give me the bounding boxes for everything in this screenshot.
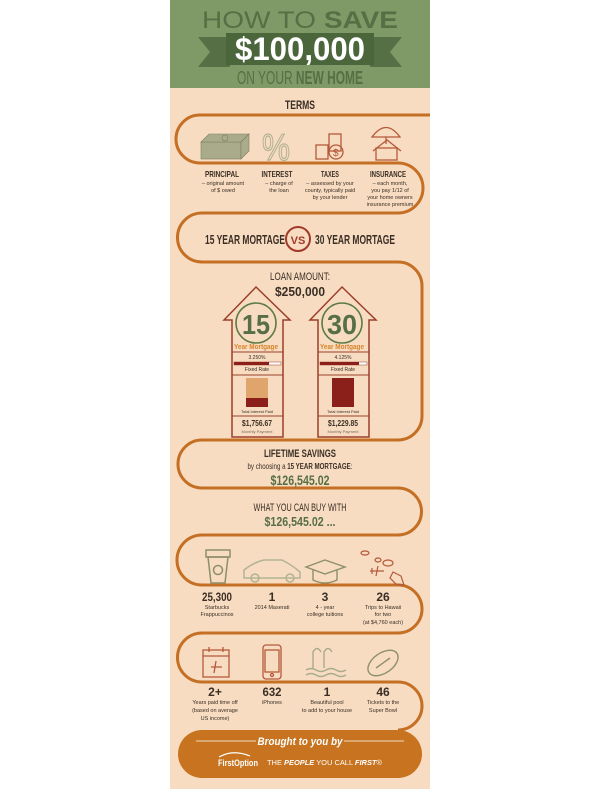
stat: hawaii: for two	[375, 612, 391, 618]
stat: starbucks: Frappuccinos	[200, 612, 234, 618]
serpentine path	[176, 115, 430, 730]
lifetime savings: by choosing a 15 YEAR MORTGAGE:	[248, 462, 352, 471]
stat: maserati: 1	[269, 590, 276, 604]
icon: graduation cap	[306, 560, 345, 583]
term: interest	[262, 169, 293, 194]
stat: super bowl	[367, 685, 399, 714]
heading: terms: TERMS	[285, 98, 315, 112]
stat: iphones	[262, 685, 282, 706]
icon: car	[244, 560, 300, 582]
term: interest: the loan	[269, 188, 289, 194]
stat: maserati	[255, 590, 289, 611]
stat: pool: 1	[324, 685, 331, 699]
stat: super bowl: Super Bowl	[369, 708, 397, 714]
loan amount: LOAN AMOUNT:	[270, 271, 330, 283]
panel: 30 year house: Fixed Rate	[331, 367, 355, 373]
term: principal: PRINCIPAL	[205, 169, 239, 179]
stat: pool: Beautiful pool	[310, 700, 344, 706]
stat: iphones: iPhones	[262, 700, 282, 706]
row 2 stats	[192, 685, 399, 722]
icon: coffee cup	[206, 550, 230, 583]
stat: paid time off: US income)	[201, 716, 230, 722]
stat: super bowl: Tickets to the	[367, 700, 399, 706]
stat: hawaii: (at $4,760 each)	[363, 620, 403, 626]
term: principal: – original amount	[202, 181, 245, 187]
heading: 15 vs 30: 30 YEAR MORTAGE	[315, 232, 395, 247]
term: taxes	[305, 169, 355, 201]
term: taxes: – assessed by your	[306, 181, 354, 187]
panel: 15 year house: 3.250%	[249, 355, 266, 361]
stat: hawaii: 26	[376, 590, 390, 604]
panel: 30 year house: 30	[327, 309, 357, 340]
stat: paid time off: Years paid time off	[192, 700, 238, 706]
panel: 30 year house: 4.125%	[335, 355, 352, 361]
title line 1: HOW TO SAVE	[202, 7, 398, 34]
stat: tuition: 3	[322, 590, 329, 604]
stat: hawaii	[363, 590, 403, 626]
panel: 15 year house: Total Interest Paid	[241, 409, 273, 414]
panel: 15 year house	[224, 287, 290, 437]
what you can buy heading: $126,545.02 ...	[264, 514, 336, 529]
loan amount	[270, 271, 330, 299]
heading: 15 vs 30: 15 YEAR MORTAGE	[205, 232, 285, 247]
title line 3: ON YOUR NEW HOME	[237, 68, 363, 88]
term: insurance: INSURANCE	[370, 169, 406, 179]
stat: pool: to add to your house	[302, 708, 352, 714]
lifetime savings: LIFETIME SAVINGS	[264, 448, 336, 460]
panel: 30 year house: $1,229.85	[328, 419, 358, 428]
ribbon: $100,000	[235, 31, 365, 67]
banner: brought to you by: Brought to you by	[258, 736, 343, 748]
term: insurance	[367, 169, 414, 208]
term: principal	[202, 169, 245, 194]
panel: 30 year house: Monthly Payment	[328, 429, 359, 434]
panel: 15 year house: Monthly Payment	[242, 429, 273, 434]
term: taxes: by your lender	[313, 195, 348, 201]
loan amount: $250,000	[275, 284, 325, 299]
heading: 15 vs 30: VS	[291, 235, 305, 247]
icon: hawaii islands plane	[361, 551, 404, 585]
stat: pool	[302, 685, 352, 714]
row 1 stats	[200, 590, 403, 626]
logo: first option	[218, 753, 258, 768]
panel: 15 year house: $1,756.67	[242, 419, 272, 428]
banner: brought to you by	[178, 730, 422, 778]
heading: 15 vs 30	[205, 227, 395, 251]
header	[170, 0, 430, 88]
panel: 15 year house: Year Mortgage	[234, 344, 278, 351]
term: insurance: insurance premium	[367, 202, 414, 208]
stat: tuition	[307, 590, 343, 618]
panel: 15 year house: Fixed Rate	[245, 367, 269, 373]
panel: 30 year house: Year Mortgage	[320, 344, 364, 351]
term: interest: – charge of	[265, 181, 293, 187]
stat: tuition: 4 - year	[316, 605, 334, 611]
lifetime savings	[248, 448, 352, 488]
lifetime savings: $126,545.02	[270, 472, 330, 488]
stat: starbucks: 25,300	[202, 590, 232, 604]
icon: iphone	[263, 645, 281, 679]
stat: tuition: college tuitions	[307, 612, 343, 618]
term: interest: INTEREST	[262, 169, 293, 179]
stat: super bowl: 46	[376, 685, 390, 699]
panel: background	[170, 0, 430, 789]
icon: pool	[306, 648, 346, 676]
icon: insurance house umbrella	[372, 128, 401, 160]
terms labels	[202, 169, 414, 208]
term: taxes: TAXES	[321, 169, 339, 179]
icon: principal money stack	[201, 134, 249, 159]
term: principal: of $ owed	[211, 188, 235, 194]
term: insurance: you pay 1/12 of	[371, 188, 409, 194]
stat: paid time off	[192, 685, 238, 722]
logo: first option: FirstOption	[218, 758, 258, 768]
panel: 30 year house: Total Interest Paid	[327, 409, 359, 414]
icon: taxes coins: $	[333, 148, 339, 159]
stat: hawaii: Trips to Hawaii	[365, 605, 401, 611]
panel: 15 year house: 15	[242, 309, 270, 340]
what you can buy heading	[254, 502, 347, 529]
what you can buy heading: WHAT YOU CAN BUY WITH	[254, 502, 347, 514]
stat: starbucks: Starbucks	[205, 605, 229, 611]
stat: starbucks	[200, 590, 234, 618]
stat: maserati: 2014 Maserati	[255, 605, 289, 611]
stat: paid time off: (based on average	[192, 708, 238, 714]
stat: iphones: 632	[262, 685, 282, 699]
banner: brought to you by: THE PEOPLE YOU CALL FIRST®	[267, 759, 383, 767]
icon: calendar plane	[203, 647, 229, 677]
stat: paid time off: 2+	[208, 685, 222, 699]
term: insurance: your home owners	[367, 195, 413, 201]
term: taxes: county, typically paid	[305, 188, 355, 194]
ribbon	[198, 31, 402, 67]
term: insurance: – each month,	[373, 181, 408, 187]
panel: 30 year house	[310, 287, 376, 437]
icon: taxes coins	[316, 134, 343, 159]
icon: interest percent: %	[262, 127, 290, 169]
icon: football	[363, 645, 403, 681]
